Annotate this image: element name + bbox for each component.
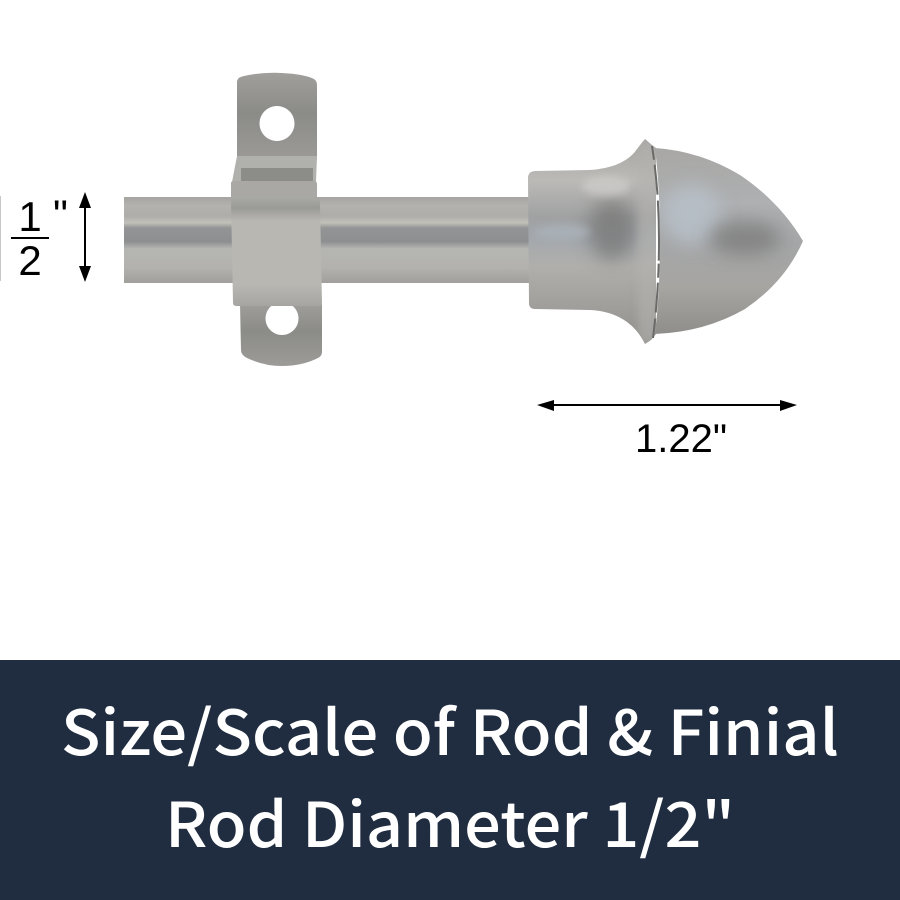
dome shading — [662, 185, 781, 255]
bracket front clip — [231, 197, 322, 306]
horizontal double arrow — [537, 400, 797, 411]
banner line two: Rod Diameter 1/2" — [165, 775, 735, 865]
bottom bracket tab — [240, 302, 322, 366]
banner line one: Size/Scale of Rod & Finial — [61, 683, 839, 773]
title banner — [0, 660, 900, 900]
fraction one half: 1 — [18, 193, 42, 240]
fraction one half: " — [53, 191, 68, 238]
fraction one half — [11, 191, 68, 284]
bracket bend — [232, 156, 317, 182]
left edge mark — [0, 196, 1, 281]
dimension: rod diameter — [11, 191, 91, 284]
rod — [124, 197, 532, 283]
fraction one half: 2 — [18, 237, 42, 284]
rod with bracket and finial — [124, 73, 803, 366]
vertical double arrow — [79, 192, 91, 282]
collar shading — [534, 140, 658, 345]
top bracket tab — [237, 73, 317, 162]
bracket back lip — [231, 181, 317, 197]
finial seam — [652, 146, 659, 338]
finial collar — [528, 139, 656, 344]
dome — [655, 148, 803, 334]
finial — [528, 139, 803, 345]
dimension: finial length — [537, 400, 797, 461]
length label: 1.22" — [635, 417, 727, 461]
